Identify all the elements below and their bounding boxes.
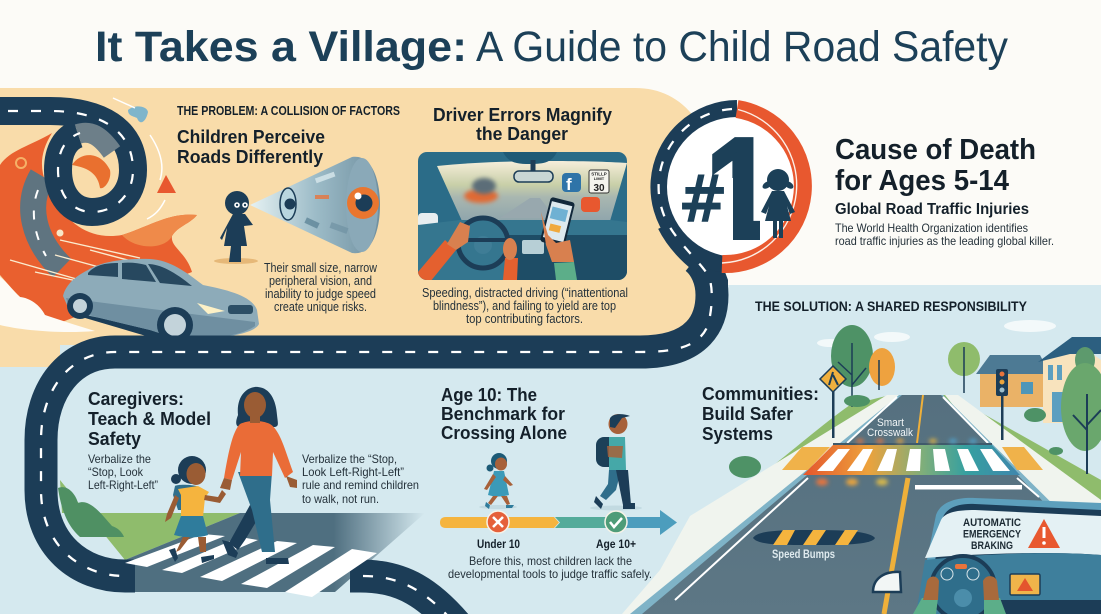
right arm (503, 258, 518, 280)
AEB label: AUTOMATIC (963, 517, 1021, 529)
heading: children perceive (177, 126, 325, 167)
side mirror (873, 572, 901, 592)
icon: social app (562, 173, 581, 192)
backpack (173, 485, 203, 510)
label: smart crosswalk: Crosswalk (867, 427, 913, 439)
rainbow crosswalk (803, 445, 1020, 475)
heading: solution label: THE SOLUTION: A SHARED RESPONSIBILITY (755, 298, 1028, 314)
back leg (229, 505, 262, 550)
label: age 10 plus: Age 10+ (596, 537, 636, 551)
panel: problem background (0, 88, 700, 367)
heading: caregivers: Caregivers: (88, 388, 184, 409)
small marks (113, 98, 165, 219)
car cockpit with emergency braking (873, 498, 1101, 614)
road centre dashes (41, 109, 732, 576)
large eye (347, 187, 379, 219)
dashboard (916, 553, 1101, 614)
crossing asphalt (120, 513, 425, 592)
car body (63, 259, 259, 343)
steering wheel (458, 218, 508, 268)
bush (729, 456, 761, 478)
sign: speed limit: LIMIT (594, 176, 605, 181)
car headlight (197, 303, 225, 314)
stat text: Cause of Death (835, 134, 1036, 166)
screen (522, 240, 544, 254)
sweater (224, 421, 293, 480)
arrow head (625, 510, 677, 535)
text: age 10 body: Before this, most children lack the (469, 554, 632, 568)
arms (204, 490, 226, 503)
title: A Guide to Child Road Safety (476, 23, 1008, 71)
text: caregivers left (88, 452, 158, 492)
under 10 band (440, 517, 559, 528)
left arm (418, 240, 456, 282)
face (186, 463, 206, 485)
smoke cloud (0, 277, 95, 332)
sleeves (913, 598, 1006, 614)
title (95, 23, 1008, 71)
heading: driver errors: the Danger (476, 123, 568, 144)
text: age 10 body: developmental tools to judge traffic safely. (448, 567, 652, 581)
illustration: mother (220, 387, 297, 564)
illustration: grass and crossing (58, 480, 425, 592)
shirt (178, 486, 209, 517)
screen (1010, 574, 1040, 595)
community scene (622, 320, 1101, 614)
hair and pigtail (178, 456, 206, 484)
heading: driver errors (433, 104, 613, 144)
grey fading road (33, 176, 62, 268)
social app letter: f (566, 175, 572, 194)
stat text: Global Road Traffic Injuries (835, 201, 1029, 218)
legs (176, 537, 206, 552)
stop bar (915, 485, 1022, 490)
white disc (667, 117, 807, 257)
bushes (58, 487, 124, 537)
illustration: child vision cone (214, 157, 380, 264)
text: caregivers right (302, 452, 419, 506)
right tree (1024, 363, 1101, 474)
small eye (280, 188, 296, 220)
text: driver errors body: Speeding, distracted driving (“inattentional (422, 286, 628, 300)
grass (60, 480, 240, 560)
crosswalk lights (816, 439, 977, 486)
heading: children perceive: Children Perceive (177, 126, 325, 147)
icon: check (605, 511, 627, 533)
text: caregivers right: Look Left-Right-Left” (302, 465, 404, 479)
text: caregivers right: to walk, not run. (302, 492, 379, 506)
title: It Takes a Village: (95, 23, 467, 71)
heading: age 10 (441, 384, 567, 443)
stat text: for Ages 5-14 (835, 165, 1009, 197)
stat text: road traffic injuries as the leading global killer. (835, 234, 1054, 248)
clouds (817, 320, 1056, 347)
cone (250, 157, 380, 253)
shadow (214, 258, 258, 264)
heading: caregivers: Teach & Model (88, 408, 211, 429)
crosswalk stripes (817, 449, 1010, 471)
text: driver errors body: top contributing factors. (466, 312, 583, 326)
figure: young girl (479, 453, 517, 509)
icon: warning triangle (157, 175, 176, 193)
sign: speed limit: 30 (593, 183, 605, 194)
icon: message (581, 197, 600, 212)
phone hand (541, 212, 574, 262)
text: caregivers left: Verbalize the (88, 452, 151, 466)
road (630, 395, 1050, 614)
phone (540, 197, 574, 243)
sign: pedestrian crossing (820, 366, 846, 438)
heading: communities: Systems (702, 423, 773, 444)
orange swirl (0, 133, 197, 322)
sign: speed limit (589, 170, 609, 194)
houses (976, 337, 1101, 423)
heading: caregivers (88, 388, 211, 449)
text: children body: create unique risks. (274, 300, 367, 314)
text: caregivers right: rule and remind children (302, 478, 419, 492)
transition band (555, 517, 625, 528)
sidewalks (622, 395, 900, 614)
heading: age 10: Benchmark for (441, 403, 565, 424)
text: children body (264, 261, 378, 314)
heading: communities: Communities: (702, 383, 819, 404)
stat text (835, 134, 1054, 248)
heading: caregivers: Safety (88, 428, 142, 449)
age timeline arrow (440, 510, 677, 535)
illustration: swirling road hazard (0, 98, 197, 332)
numeral one: 1 (706, 110, 774, 269)
winding road (0, 111, 133, 212)
orange ring (722, 109, 803, 264)
sign: speed limit: STILLP (591, 172, 607, 176)
dashboard (418, 220, 627, 280)
stat text: The World Health Organization identifies (835, 221, 1028, 235)
icon: girl (761, 169, 795, 238)
roof console (503, 152, 557, 164)
blurred car (464, 189, 498, 203)
skirt (174, 516, 208, 537)
heading: age 10: Crossing Alone (441, 422, 567, 443)
inner swirl (72, 155, 110, 188)
main road (41, 109, 737, 614)
car windows (88, 263, 192, 286)
text: driver errors body (422, 286, 628, 326)
heading: driver errors: Driver Errors Magnify (433, 104, 613, 125)
text: caregivers right: Verbalize the “Stop, (302, 452, 397, 466)
speed bump (753, 530, 875, 545)
steering wheel (931, 556, 995, 614)
text: children body: peripheral vision, and (269, 274, 372, 288)
text: driver errors body: blindness”), and failing to yield are top (433, 299, 616, 313)
heading: communities (702, 383, 819, 444)
AEB label: EMERGENCY (963, 528, 1022, 540)
icon: cross (487, 511, 509, 533)
illustration: distracted driver dashboard (418, 152, 627, 282)
illustration: child walking (165, 456, 226, 563)
windshield glass (925, 510, 1101, 558)
hash symbol: # (678, 161, 728, 238)
AEB label (963, 517, 1022, 552)
hair (236, 387, 278, 427)
label: smart crosswalk: Smart (877, 417, 904, 429)
windshield frame (916, 498, 1101, 614)
crosswalk stripes (125, 534, 377, 597)
hands (923, 576, 939, 600)
heading: age 10: Age 10: The (441, 384, 537, 405)
windshield (437, 161, 627, 221)
illustration: speeding car (63, 259, 259, 343)
traffic light (996, 369, 1008, 440)
text: caregivers left: Left-Right-Left” (88, 478, 158, 492)
text: age 10 body (448, 554, 652, 581)
blurred streaks (315, 195, 329, 199)
edge lines (675, 397, 1039, 600)
AEB label: BRAKING (971, 540, 1013, 552)
text: children body: inability to judge speed (265, 287, 376, 301)
figure: older boy (590, 414, 642, 510)
label: under 10: Under 10 (477, 537, 520, 551)
text: children body: Their small size, narrow (264, 261, 378, 275)
panel: solution background (0, 285, 1101, 614)
heading: children perceive: Roads Differently (177, 146, 324, 167)
icon: splash (128, 106, 148, 122)
front leg (238, 472, 275, 552)
text: caregivers left: “Stop, Look (88, 465, 144, 479)
heading: communities: Build Safer (702, 403, 793, 424)
centre line (917, 395, 923, 443)
label: smart crosswalk (867, 417, 913, 439)
grass hills (694, 395, 1101, 562)
face and hands (244, 392, 266, 418)
trees (831, 325, 980, 407)
side mirror (418, 213, 438, 225)
rear-view mirror (530, 160, 536, 170)
car wheels (67, 293, 93, 319)
tactile pads (782, 447, 1043, 470)
label: speed bumps: Speed Bumps (772, 549, 835, 561)
speed lines (10, 240, 140, 288)
heading: problem label: THE PROBLEM: A COLLISION OF FACTORS (177, 103, 400, 118)
child silhouette (220, 191, 253, 262)
stat badge: number one (667, 109, 807, 269)
warning triangle (1028, 519, 1060, 548)
car shadow (75, 310, 240, 343)
